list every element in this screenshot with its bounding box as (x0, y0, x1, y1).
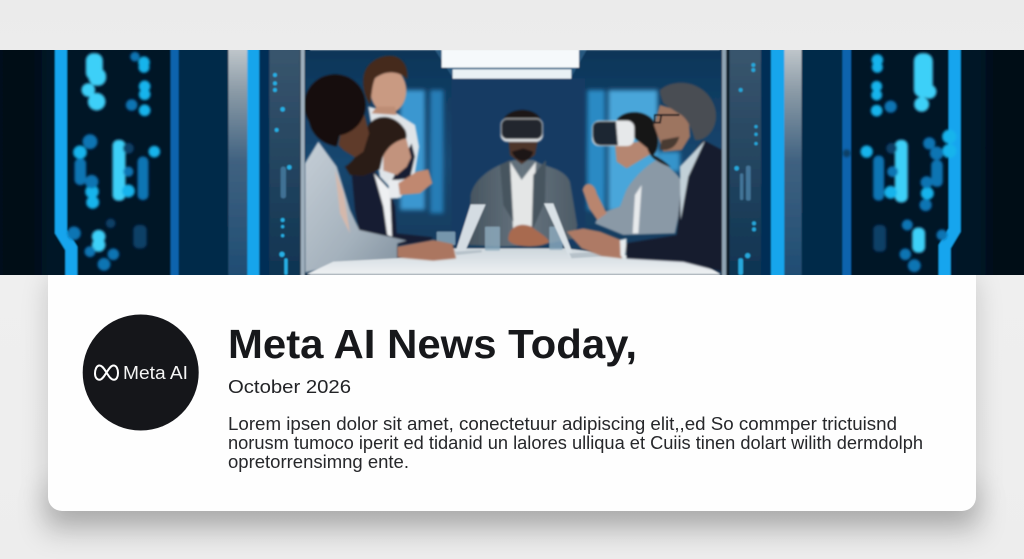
date: October 2026 (228, 376, 351, 397)
laptop right (544, 203, 615, 258)
back wall (305, 50, 722, 275)
person: woman with short dark hair (304, 74, 407, 273)
body text (228, 413, 923, 472)
icon: Meta infinity mark (95, 365, 118, 380)
laptop left (455, 204, 486, 255)
logo: Meta AI circle (83, 314, 199, 430)
person: woman in navy jacket (345, 117, 433, 245)
body text: Lorem ipsen dolor sit amet, conectetuur adipiscing elit,,ed So commper trictuisnd (228, 413, 897, 434)
title: Meta AI News Today, (228, 321, 637, 367)
person: standing woman (363, 56, 419, 198)
person: centre man with VR headset (468, 110, 577, 247)
body text: opretorrensimng ente. (228, 451, 409, 472)
photo: meeting room with VR headsets (301, 45, 726, 278)
logo wordmark: Meta AI (123, 362, 188, 383)
person: man with glasses (567, 83, 722, 272)
ceiling lights (442, 50, 579, 79)
body text: norusm tumoco iperit ed tidanid un lalores ulliqua et Cuiis tinen dolart wilith dermdolph (228, 432, 923, 453)
water glasses (437, 227, 563, 251)
panel: right server rack (720, 45, 1024, 280)
panel: card (48, 275, 976, 511)
room and centre (305, 50, 722, 275)
hand of left woman (397, 240, 456, 261)
photo frame edges (301, 45, 726, 278)
banner image (0, 45, 1024, 280)
table and centre (307, 110, 721, 274)
windows (400, 90, 680, 213)
right group of people (567, 83, 722, 272)
glasses (654, 115, 679, 123)
card shadow (44, 275, 980, 532)
panel: left server rack (0, 45, 310, 280)
left group of people (304, 56, 433, 273)
person: woman with VR headset (583, 112, 682, 235)
table (307, 248, 721, 274)
